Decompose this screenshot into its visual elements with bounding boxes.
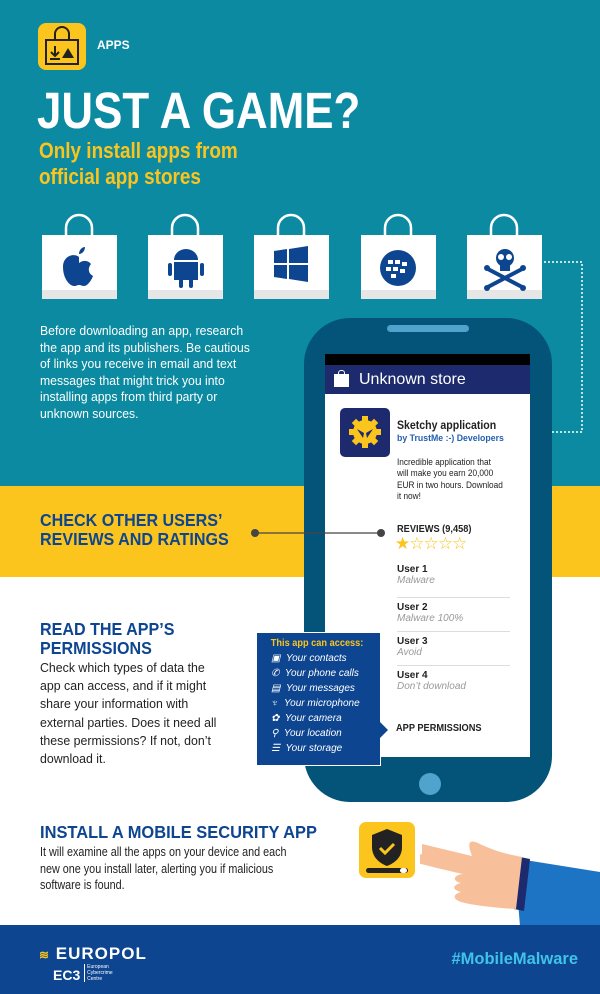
app description: EUR in two hours. Download: [397, 480, 503, 490]
store header: Unknown store: [359, 371, 466, 388]
subtitle: Only install apps from: [39, 138, 238, 163]
permissions text: these permissions? If not, don’t: [40, 733, 211, 748]
app icon: [340, 408, 390, 457]
icon: security shield: [359, 822, 415, 878]
hand pointing: [420, 842, 600, 925]
user reviews: User 1: [397, 564, 428, 575]
dotted connector arrow: [544, 261, 583, 433]
intro text: messages that might trick you into: [40, 373, 225, 388]
heading: permissions: READ THE APP’S: [40, 619, 174, 639]
hashtag: #MobileMalware: [451, 950, 578, 968]
footer: [0, 925, 600, 994]
europol logo: European Cybercrime Centre: [87, 964, 113, 982]
permissions box: ☰ Your storage: [271, 743, 342, 754]
reviews: REVIEWS (9,458): [397, 523, 471, 535]
permissions box: ♆ Your microphone: [271, 698, 360, 709]
permissions text: Check which types of data the: [40, 660, 205, 675]
app description: it now!: [397, 491, 421, 501]
user reviews: Avoid: [397, 647, 422, 658]
permissions box: ▣ Your contacts: [271, 653, 347, 664]
security text: [40, 844, 287, 892]
heading: permissions: [40, 619, 174, 658]
phone screen: ★☆☆☆☆: [395, 534, 466, 553]
icon: apps badge: [38, 23, 86, 70]
heading: check reviews: [40, 510, 229, 549]
permissions box: This app can access:: [271, 638, 363, 649]
permissions box: [256, 632, 381, 766]
user reviews: Don’t download: [397, 681, 466, 692]
permissions box: ⚲ Your location: [271, 728, 342, 739]
background teal: [0, 0, 600, 487]
title: JUST A GAME?: [37, 82, 360, 139]
europol logo: ≋ EUROPOL: [39, 944, 147, 963]
subtitle: official app stores: [39, 164, 201, 189]
app description: Incredible application that: [397, 457, 491, 467]
permissions text: share your information with: [40, 696, 188, 711]
permissions text: download it.: [40, 751, 106, 766]
intro text: the app and its publishers. Be cautious: [40, 340, 250, 355]
user reviews: Malware 100%: [397, 613, 463, 624]
permissions text: app can access, and if it might: [40, 678, 206, 693]
intro text: Before downloading an app, research: [40, 323, 243, 338]
heading: check reviews: CHECK OTHER USERS’: [40, 510, 222, 530]
intro text: unknown sources.: [40, 406, 138, 421]
label: APPS: APPS: [97, 38, 130, 52]
store header: [325, 365, 530, 394]
phone screen: [325, 354, 530, 757]
connector line reviews: [251, 529, 385, 537]
intro text: [40, 323, 250, 421]
security text: software is found.: [40, 877, 125, 892]
permissions box: ▤ Your messages: [271, 683, 355, 694]
app description: will make you earn 20,000: [397, 468, 493, 478]
permissions text: [40, 660, 216, 766]
phone screen: by TrustMe :-) Developers: [397, 433, 504, 444]
user reviews: [396, 564, 510, 692]
app permissions label: APP PERMISSIONS: [396, 722, 482, 734]
user reviews: User 4: [397, 670, 428, 681]
heading: security app: INSTALL A MOBILE SECURITY APP: [40, 822, 317, 842]
permissions box: ✆ Your phone calls: [271, 668, 359, 679]
app description: [397, 457, 503, 501]
yellow band: [0, 486, 600, 577]
phone: [304, 318, 552, 802]
user reviews: User 2: [397, 602, 428, 613]
europol logo: [39, 944, 147, 983]
permissions box: ✿ Your camera: [271, 713, 342, 724]
user reviews: Malware: [397, 575, 435, 586]
user reviews: User 3: [397, 636, 428, 647]
security text: new one you install later, alerting you if malicious: [40, 860, 273, 876]
heading: check reviews: REVIEWS AND RATINGS: [40, 529, 229, 549]
security text: It will examine all the apps on your device and each: [40, 844, 287, 859]
app title: Sketchy application: [397, 418, 496, 432]
intro text: of links you receive in email and text: [40, 356, 236, 371]
heading: permissions: PERMISSIONS: [40, 638, 152, 658]
subtitle: [39, 138, 238, 189]
permissions text: external parties. Does it need all: [40, 715, 216, 730]
europol logo: EC3: [53, 967, 80, 983]
store bags: [42, 214, 542, 299]
intro text: installing apps from third party or: [40, 389, 217, 404]
